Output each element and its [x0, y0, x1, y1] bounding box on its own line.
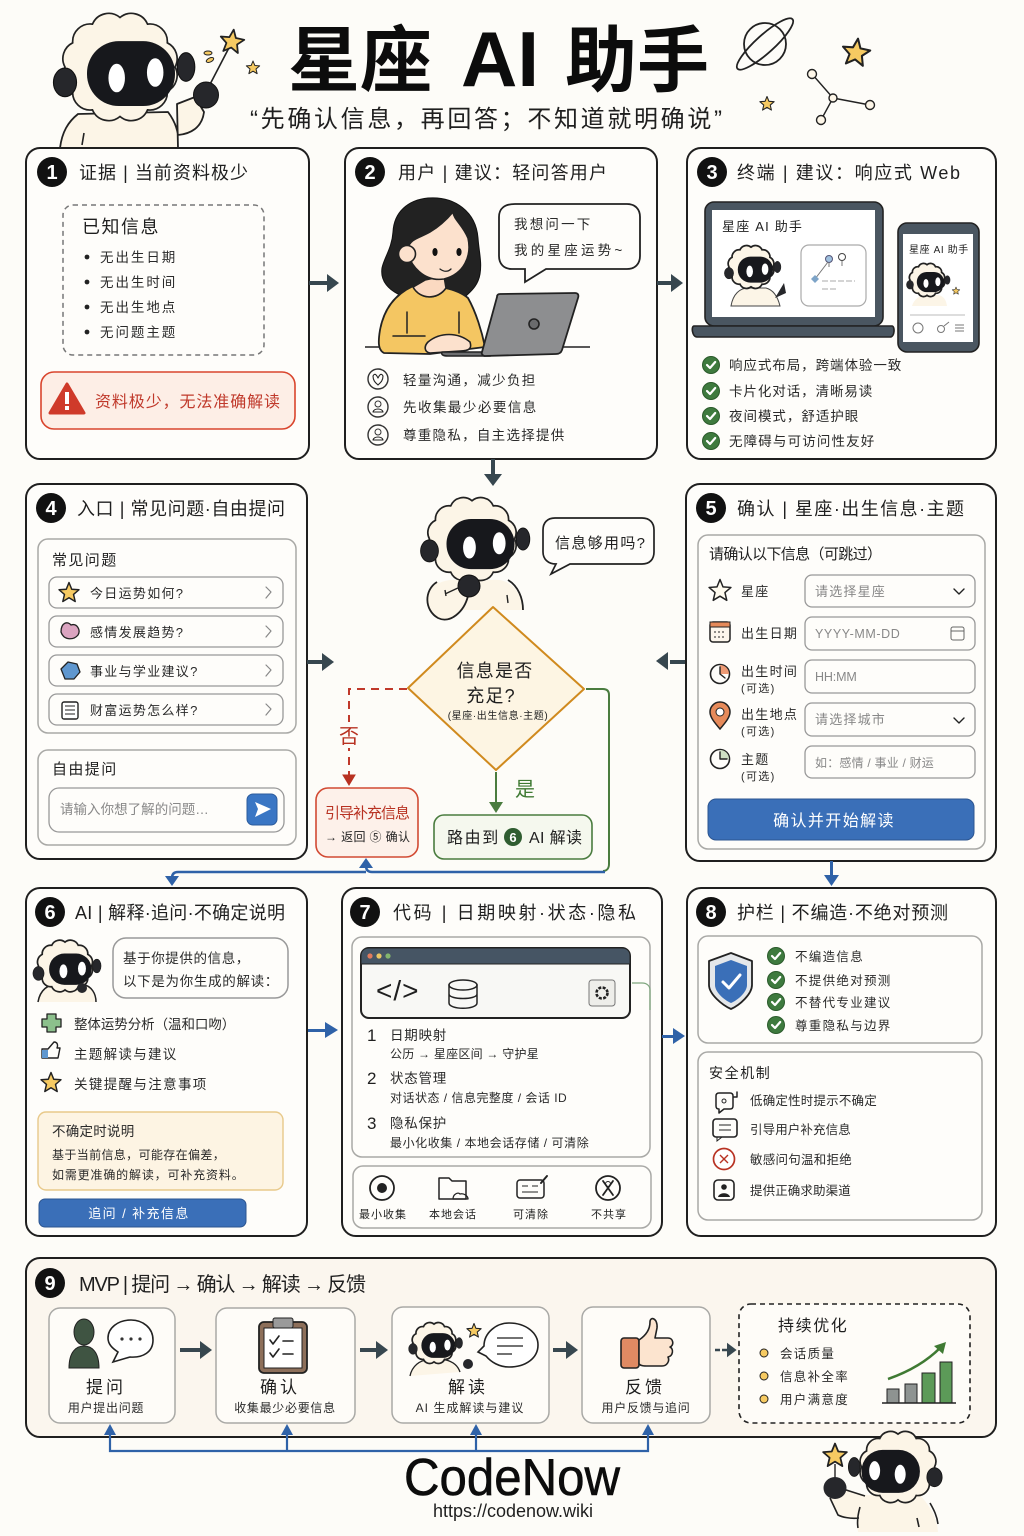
badge 8: 8	[705, 902, 717, 924]
heading 3: 终端 | 建议：响应式 Web	[737, 163, 960, 183]
step: confirm: 确认	[260, 1378, 300, 1397]
uncertainty box: 如需更准确的解读，可补充资料。	[52, 1167, 245, 1182]
list 6: 整体运势分析（温和口吻）	[74, 1017, 236, 1032]
guard list box: 不提供绝对预测	[795, 973, 892, 988]
arrow 1 to 2	[309, 274, 339, 292]
step: confirm: 收集最少必要信息	[234, 1400, 336, 1415]
code box: 2	[367, 1069, 376, 1088]
uncertainty box: 基于当前信息，可能存在偏差，	[52, 1147, 226, 1162]
decision diamond: (星座·出生信息·主题)	[448, 709, 548, 722]
badge 2	[355, 157, 385, 187]
badge 8	[696, 897, 726, 927]
badge 3: 3	[706, 162, 718, 184]
badge 7: 7	[359, 902, 371, 924]
title: 星座	[288, 22, 432, 102]
form: 星座	[741, 584, 770, 599]
badge 1: 1	[46, 162, 58, 184]
badge 3	[697, 157, 727, 187]
arrow 4 to center	[307, 653, 334, 671]
uncertainty box: 不确定时说明	[52, 1124, 135, 1139]
laptop	[692, 202, 894, 337]
box: route to AI: 路由到	[447, 829, 500, 847]
privacy icons: 不共享	[591, 1207, 627, 1221]
arrow step 3	[553, 1341, 578, 1359]
heading 6: AI | 解释·追问·不确定说明	[75, 903, 285, 923]
arrow 2 down	[484, 459, 502, 486]
subtitle quote: “先确认信息，再回答；不知道就明确说”	[250, 106, 722, 133]
list 3: 夜间模式，舒适护眼	[729, 409, 859, 424]
safety box: 低确定性时提示不确定	[750, 1093, 878, 1108]
code box: 对话状态 / 信息完整度 / 会话 ID	[390, 1090, 568, 1105]
code box: 最小化收集 / 本地会话存储 / 可清除	[390, 1135, 590, 1150]
privacy icons: 最小收集	[359, 1207, 407, 1221]
form: 出生时间	[741, 664, 798, 679]
step: interpret: AI 生成解读与建议	[416, 1401, 524, 1415]
follow-up button	[39, 1199, 246, 1227]
box: route to AI: AI 解读	[529, 829, 582, 847]
badge 1	[37, 157, 67, 187]
heading 5: 确认 | 星座·出生信息·主题	[737, 499, 964, 519]
code box: 公历 → 星座区间 → 守护星	[390, 1046, 540, 1061]
confirm button	[708, 799, 974, 840]
badge 4: 4	[45, 498, 57, 520]
guard list box: 尊重隐私与边界	[795, 1018, 892, 1033]
continuous optimization box	[739, 1304, 970, 1423]
form: 请选择星座	[815, 584, 886, 599]
panel 6: AI	[26, 888, 307, 1236]
list 2: 尊重隐私，自主选择提供	[403, 428, 565, 443]
heading 1: 证据 | 当前资料极少	[79, 163, 248, 183]
title: AI	[461, 15, 539, 103]
decision diamond	[408, 607, 584, 770]
form: 请选择城市	[815, 712, 886, 727]
safety box: 提供正确求助渠道	[750, 1183, 852, 1198]
badge 2: 2	[364, 162, 376, 184]
box: route to AI: 6	[509, 830, 517, 845]
form: HH:MM	[815, 670, 858, 684]
heading 8: 护栏 | 不编造·不绝对预测	[737, 903, 948, 923]
arrow 6 to 7	[308, 1022, 338, 1038]
form: 主题	[741, 752, 770, 767]
bubble: enough info	[543, 518, 654, 574]
code box: 隐私保护	[390, 1116, 447, 1131]
guard list box: 不替代专业建议	[795, 995, 892, 1010]
panel 9: MVP	[26, 1258, 996, 1437]
heading 7: 代码 | 日期映射·状态·隐私	[393, 903, 636, 923]
arrow step 2	[360, 1341, 388, 1359]
step: confirm	[216, 1308, 355, 1423]
warning callout: 资料极少，无法准确解读	[95, 393, 280, 411]
illustration: woman with laptop	[365, 198, 590, 356]
badge 7	[350, 897, 380, 927]
safety box: 安全机制	[709, 1065, 771, 1081]
box: guide to fill info	[316, 788, 418, 857]
safety box: 敏感问句温和拒绝	[750, 1152, 853, 1167]
privacy icons	[353, 1166, 651, 1228]
title	[288, 15, 709, 103]
heading 2: 用户 | 建议：轻问答用户	[398, 163, 607, 183]
free question box: 自由提问	[52, 761, 118, 778]
arrow 2 to 3	[657, 274, 683, 292]
form: 出生日期	[741, 626, 798, 641]
badge 6: 6	[44, 902, 56, 924]
heading 4: 入口 | 常见问题·自由提问	[77, 499, 285, 519]
branch: yes	[489, 772, 535, 813]
free question box	[38, 750, 296, 845]
code box: 状态管理	[390, 1071, 447, 1086]
form: 请确认以下信息（可跳过）	[709, 546, 882, 563]
known info box	[63, 205, 264, 355]
step: feedback: 用户反馈与追问	[602, 1400, 690, 1415]
speech bubble: 我想问一下	[514, 217, 591, 232]
list 6: 主题解读与建议	[74, 1047, 177, 1062]
FAQ box: 今日运势如何?	[90, 586, 184, 601]
badge 9	[35, 1268, 65, 1298]
list 2: 轻量沟通，减少负担	[403, 373, 536, 388]
code box	[352, 937, 650, 1157]
center mascot: thinking	[421, 498, 530, 620]
list 3: 无障碍与可访问性友好	[729, 434, 875, 449]
uncertainty box	[38, 1112, 283, 1190]
continuous optimization box: 用户满意度	[780, 1392, 849, 1407]
list 6: 关键提醒与注意事项	[74, 1076, 207, 1092]
panel 1: evidence	[26, 148, 309, 459]
known info box: 已知信息	[82, 217, 160, 237]
confirm button: 确认并开始解读	[773, 812, 895, 830]
panel 5: confirm	[686, 484, 996, 861]
list 6	[41, 1014, 236, 1092]
branch: no	[338, 689, 407, 785]
panel 8: guardrails	[687, 888, 996, 1236]
speech bubble	[499, 204, 640, 282]
step: interpret: 解读	[448, 1378, 488, 1397]
guard list box: 不编造信息	[795, 949, 864, 964]
arrow to optimize	[715, 1343, 737, 1357]
follow-up button: 追问 / 补充信息	[88, 1206, 190, 1221]
list 3	[702, 356, 902, 450]
badge 4	[36, 493, 66, 523]
form: 出生地点	[741, 707, 798, 722]
bubble: enough info: 信息够用吗?	[555, 535, 645, 552]
mascot: pointing wand	[53, 13, 260, 148]
decoration: planet, stars, constellation	[731, 13, 874, 125]
arrow 5 down	[824, 861, 839, 886]
badge 5	[696, 493, 726, 523]
FAQ box: 常见问题	[52, 552, 118, 569]
panel 4: entry	[26, 484, 307, 859]
bubble: based on info	[113, 938, 288, 998]
laptop: 星座 AI 助手	[722, 219, 803, 234]
privacy icons: 可清除	[513, 1207, 549, 1221]
box: guide to fill info: 引导补充信息	[325, 805, 410, 822]
badge 6	[35, 897, 65, 927]
step: feedback: 反馈	[625, 1378, 665, 1397]
safety box	[698, 1052, 982, 1220]
list 2	[368, 369, 565, 445]
decision diamond: 充足?	[466, 686, 516, 706]
heading 9: MVP | 提问 → 确认 → 解读 → 反馈	[79, 1273, 366, 1296]
known info box: 无出生地点	[100, 300, 176, 315]
known info box: 无问题主题	[100, 325, 176, 340]
known info box: 无出生时间	[100, 275, 176, 290]
step: ask	[49, 1308, 175, 1423]
known info box: 无出生日期	[100, 250, 176, 265]
continuous optimization box: 信息补全率	[780, 1369, 849, 1384]
privacy icons: 本地会话	[429, 1207, 477, 1221]
phone: 星座 AI 助手	[909, 243, 969, 256]
sufficient branch line and feedback connector	[165, 689, 609, 886]
list 2: 先收集最少必要信息	[403, 399, 537, 415]
free question box: 请输入你想了解的问题…	[60, 802, 210, 817]
box: guide to fill info: → 返回 ⑤ 确认	[325, 830, 410, 844]
FAQ box: 感情发展趋势?	[90, 625, 184, 640]
arrow step 1	[180, 1341, 212, 1359]
panel 3: terminal	[687, 148, 996, 459]
feedback loop arrows	[104, 1424, 654, 1451]
arrow 5 to center	[656, 652, 686, 670]
box: route to AI	[434, 815, 592, 859]
mascot small	[33, 940, 101, 1002]
code box: </>	[376, 975, 419, 1006]
branch: yes: 是	[515, 779, 535, 801]
bubble: based on info: 以下是为你生成的解读：	[123, 974, 279, 989]
mascot: bottom right	[823, 1431, 942, 1532]
list 3: 卡片化对话，清晰易读	[729, 384, 873, 399]
panel 2: user	[345, 148, 657, 459]
badge 5: 5	[705, 498, 717, 520]
form: (可选)	[741, 770, 776, 783]
badge 9: 9	[44, 1273, 56, 1295]
form: 如：感情 / 事业 / 财运	[815, 755, 935, 770]
decision diamond: 信息是否	[457, 661, 533, 681]
brand url: https://codenow.wiki	[433, 1501, 593, 1521]
phone	[898, 223, 979, 352]
step: interpret	[392, 1307, 549, 1423]
continuous optimization box: 持续优化	[778, 1317, 848, 1335]
form: (可选)	[741, 682, 776, 695]
arrow 7 to 8	[662, 1028, 685, 1044]
FAQ box: 事业与学业建议?	[90, 664, 199, 679]
safety box: 引导用户补充信息	[750, 1122, 852, 1137]
bubble: based on info: 基于你提供的信息，	[123, 950, 250, 966]
brand: CodeNow: CodeNow	[404, 1449, 620, 1507]
code box: 日期映射	[390, 1028, 447, 1043]
step: ask: 用户提出问题	[68, 1400, 144, 1415]
code box: 1	[367, 1026, 376, 1045]
speech bubble: 我的星座运势~	[514, 243, 623, 258]
form: (可选)	[741, 725, 776, 738]
form: YYYY-MM-DD	[815, 627, 901, 641]
warning callout	[41, 372, 295, 429]
list 3: 响应式布局，跨端体验一致	[729, 357, 902, 373]
step: ask: 提问	[86, 1378, 126, 1397]
step: feedback	[582, 1307, 710, 1423]
FAQ box: 财富运势怎么样?	[90, 703, 199, 718]
continuous optimization box: 会话质量	[780, 1347, 835, 1361]
form	[698, 535, 985, 849]
panel 7: code	[342, 888, 662, 1236]
code box: 3	[367, 1114, 376, 1133]
guard list box	[698, 936, 982, 1043]
title: 助手	[565, 22, 709, 102]
FAQ box	[38, 539, 296, 733]
branch: no: 否	[339, 726, 359, 748]
